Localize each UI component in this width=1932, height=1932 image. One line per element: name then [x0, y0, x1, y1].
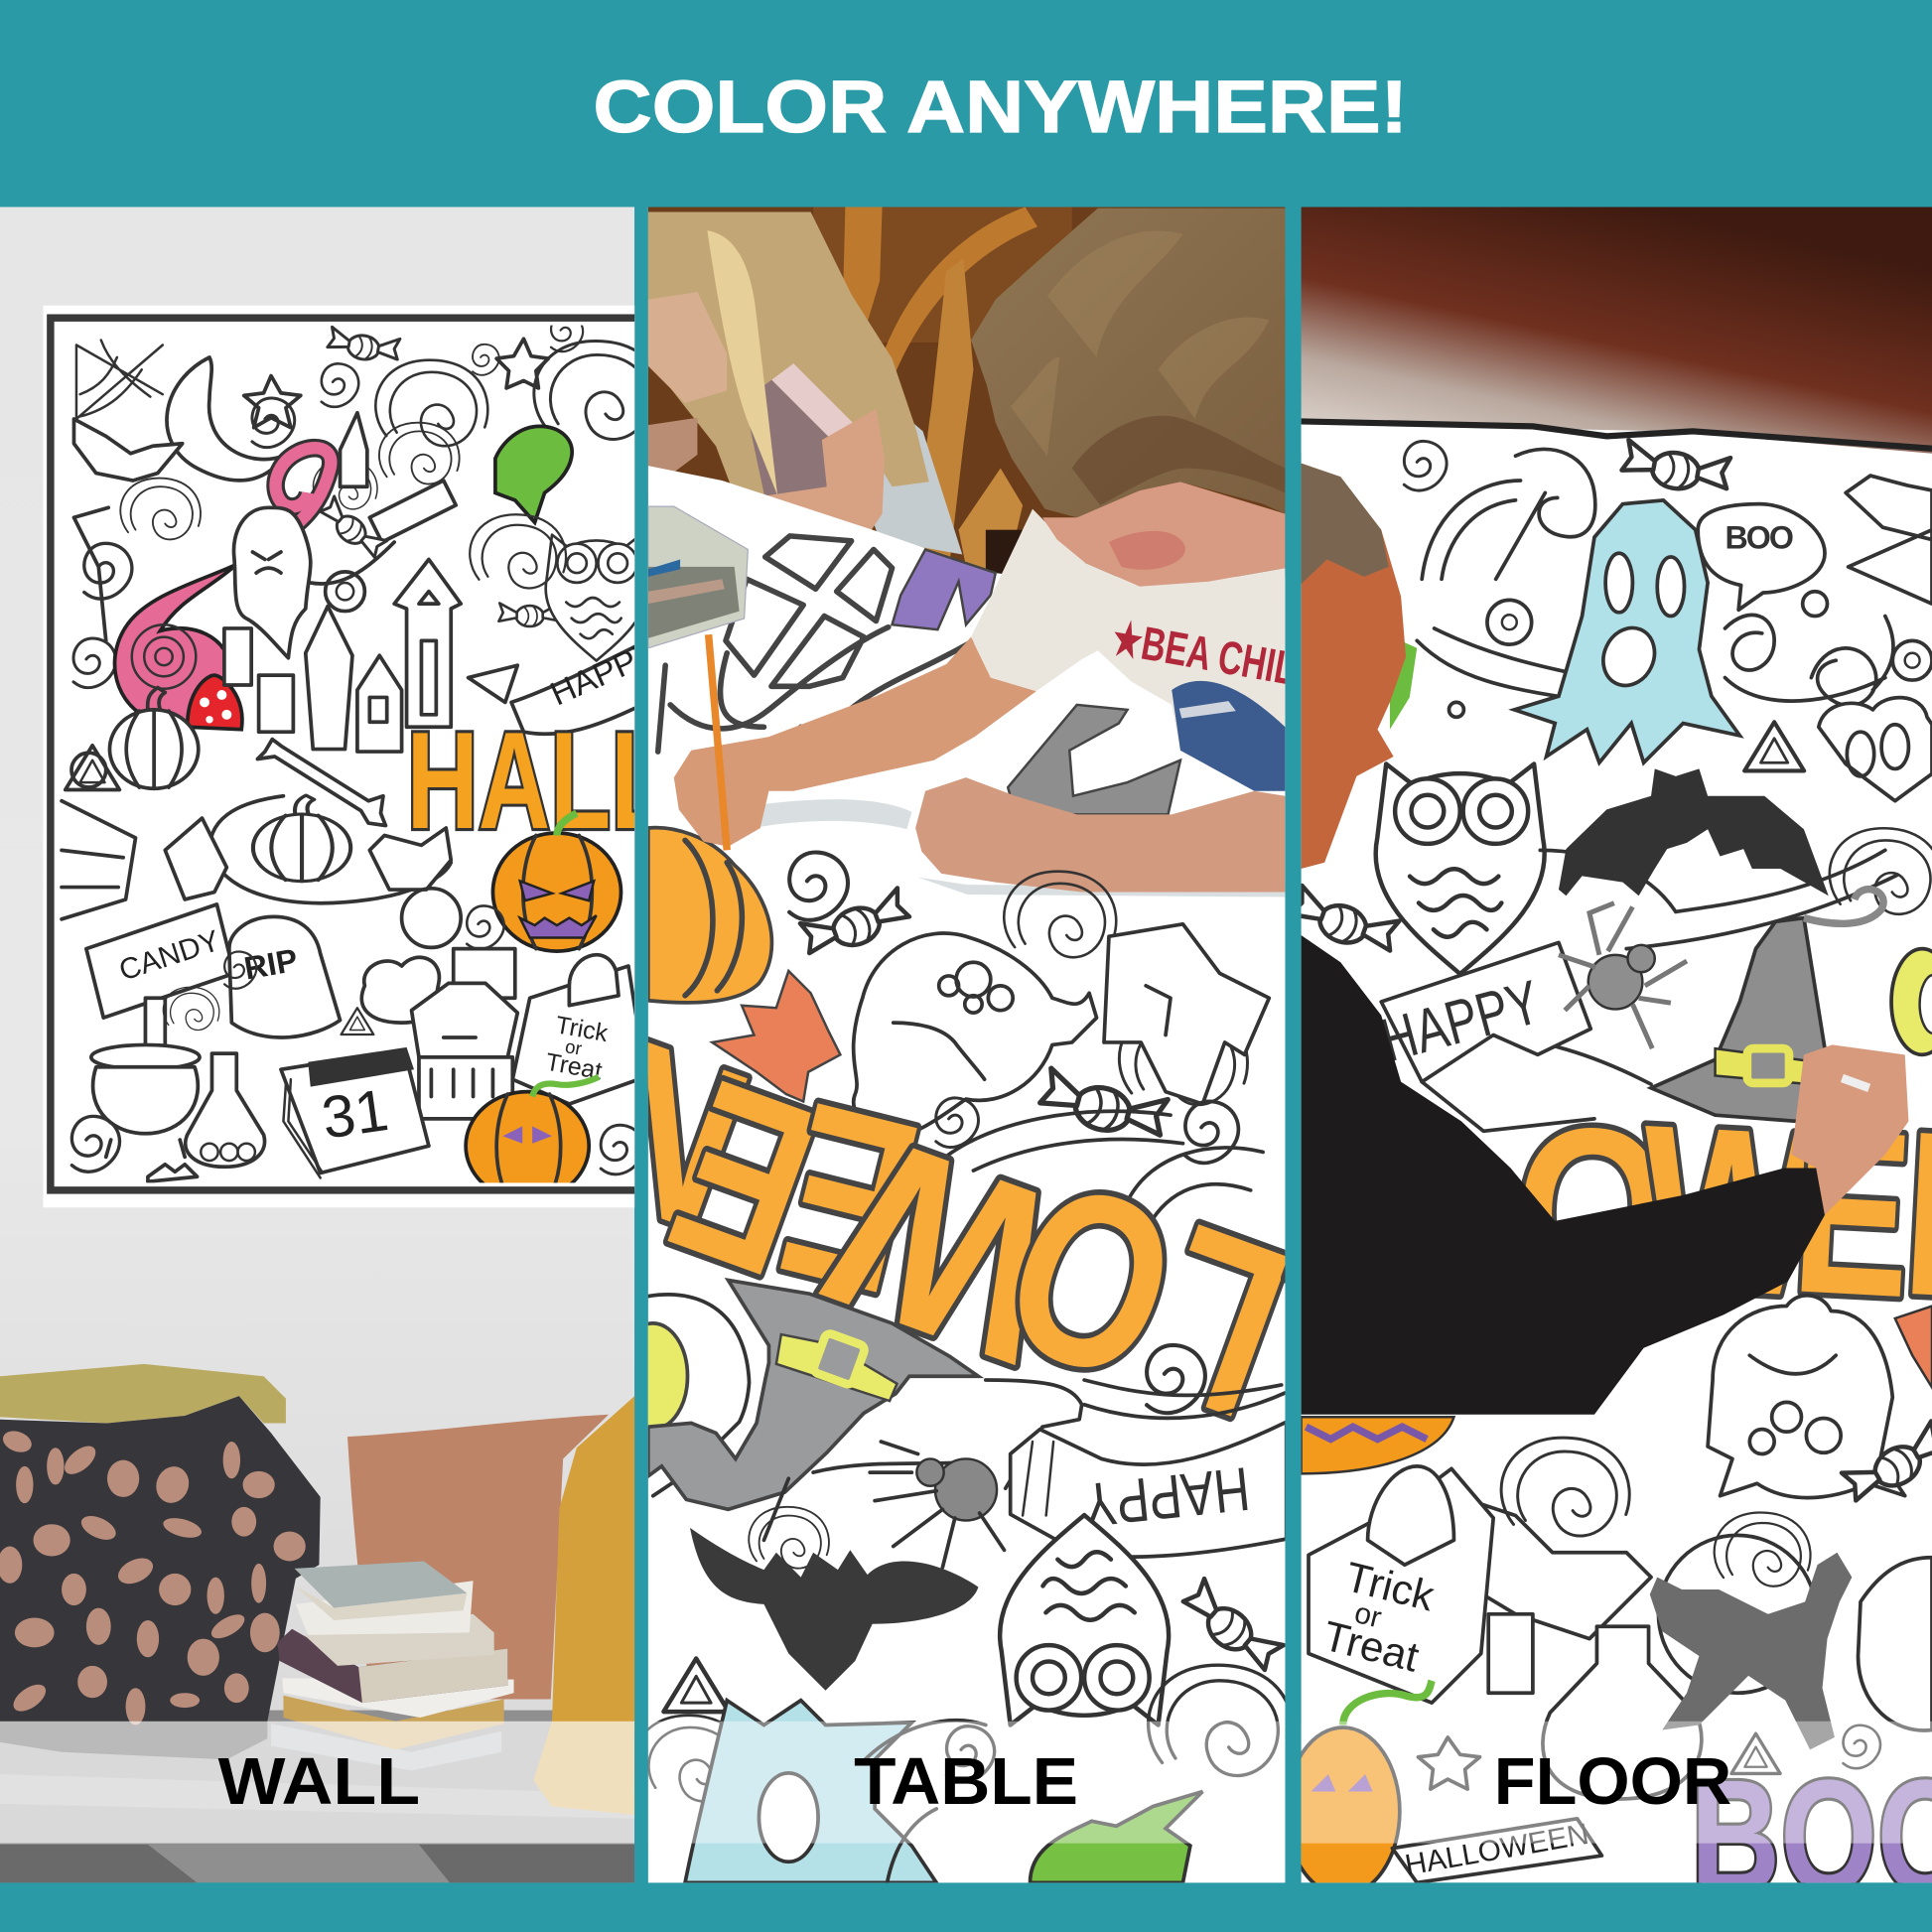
rip tombstone [229, 916, 341, 1037]
arm shadows [740, 799, 1285, 897]
panel: floor [1287, 207, 1932, 1926]
pumpkin with stem [1287, 1681, 1432, 1895]
orange lettering [1510, 1076, 1932, 1350]
maple leaf edge [1895, 1307, 1932, 1387]
orange halloween upside down: N [553, 987, 777, 1281]
witch hat [648, 1280, 978, 1509]
lower doodles: Trick [1341, 1553, 1440, 1620]
pumpkin fragment [1302, 1417, 1453, 1473]
floor doodles [1287, 440, 1932, 1131]
green hand [495, 426, 572, 522]
grey witch hat [1651, 890, 1883, 1121]
spider [1559, 903, 1687, 1048]
lower doodles [1309, 1421, 1932, 1799]
orange halloween upside down: L [1117, 1173, 1318, 1470]
spider and banner: HAPPY [1080, 1453, 1253, 1539]
label: wall: WALL [218, 1744, 420, 1819]
hand on pumpkin [674, 742, 760, 847]
girl [623, 211, 962, 557]
poster on table [648, 466, 1285, 1882]
orange halloween upside down: O [974, 1126, 1208, 1435]
orange halloween upside down [553, 987, 1415, 1497]
pencil [709, 634, 727, 850]
basket leaf pattern [0, 1428, 306, 1725]
maple leaf [712, 971, 840, 1102]
potion bottle [186, 1053, 265, 1167]
orange halloween upside down: L [1213, 1200, 1415, 1497]
green hand [1031, 1792, 1202, 1882]
frog [1708, 1296, 1905, 1498]
dark bat [690, 1528, 978, 1691]
candy sign: CANDY [115, 924, 224, 988]
blue ghost [1514, 500, 1739, 762]
jack-o-lantern [492, 813, 621, 951]
trick or treat bag: Trick [553, 1012, 611, 1047]
label band [648, 1722, 1285, 1844]
pink six [115, 564, 236, 728]
orange lettering: E [1787, 1080, 1918, 1347]
poster on wall [43, 306, 671, 1207]
panel: table [647, 207, 1285, 1882]
wood chairs background [648, 207, 1285, 604]
cauldron [91, 1044, 200, 1157]
candy sign [84, 902, 228, 1044]
swirls under letters [1147, 1345, 1205, 1413]
haunted castle [306, 559, 461, 752]
poster doodles [62, 315, 671, 1200]
dark bat [1559, 768, 1829, 896]
doodles mid [789, 852, 1269, 1220]
castle [412, 949, 517, 1119]
ghost [233, 507, 311, 658]
floor doodles: HAPPY [1374, 968, 1547, 1075]
spider and banner [763, 1380, 1287, 1568]
orange halloween upside down: E [639, 1029, 848, 1327]
mushroom [188, 675, 242, 730]
orange halloween upside down: E [758, 1050, 942, 1345]
orange halloween upside down: W [800, 1085, 1091, 1415]
label band [0, 1722, 634, 1844]
lower doodles: or [1351, 1596, 1385, 1634]
owl upside down [1000, 1515, 1169, 1725]
orange lettering: W [1634, 1076, 1825, 1346]
trick or treat bag [512, 955, 645, 1104]
label: table: TABLE [854, 1744, 1078, 1819]
boo speech bubble [1698, 504, 1825, 610]
calendar 31: 31 [318, 1076, 392, 1152]
trick or treat bag: or [564, 1035, 584, 1059]
happy banner: HAPPY [545, 633, 663, 713]
shirt print [1108, 611, 1300, 791]
mustard chair [533, 1396, 634, 1815]
boo speech bubble: BOO [1725, 519, 1794, 555]
panel: wall [0, 207, 671, 1882]
orange lettering: O [1510, 1078, 1674, 1344]
grey cat [1650, 1553, 1852, 1749]
pink nine [259, 448, 331, 545]
poster on floor [1302, 421, 1932, 1882]
shirt print: ★BEA CHIL [1108, 611, 1300, 695]
crayon box [648, 506, 748, 648]
calendar 31 [281, 1047, 429, 1177]
lower doodles: Treat [1318, 1612, 1424, 1681]
boy [674, 208, 1300, 893]
fabric basket [0, 1364, 321, 1759]
table doodles top [658, 536, 973, 788]
yellow circle [1891, 949, 1932, 1054]
yellow circle [619, 1295, 750, 1496]
orange hall lettering: HALL [407, 703, 671, 858]
happy banner [467, 645, 635, 737]
label band [1302, 1722, 1932, 1844]
cushion [347, 1415, 609, 1699]
halloween ribbon: HALLOWEEN [1403, 1818, 1591, 1882]
blue ghost [685, 1701, 936, 1882]
trick or treat bag: Treat [544, 1049, 604, 1085]
floor rug [0, 1711, 634, 1882]
stack of books [271, 1561, 514, 1770]
grey hat top [1008, 705, 1180, 814]
pumpkin slice [648, 828, 771, 1003]
wood floor [1302, 207, 1932, 454]
rip tombstone: RIP [241, 942, 300, 987]
title: COLOR ANYWHERE! [594, 66, 1408, 148]
man [1302, 464, 1908, 1415]
label: floor: FLOOR [1494, 1744, 1731, 1819]
orange pumpkin [466, 1077, 599, 1200]
purple shape [893, 550, 996, 629]
